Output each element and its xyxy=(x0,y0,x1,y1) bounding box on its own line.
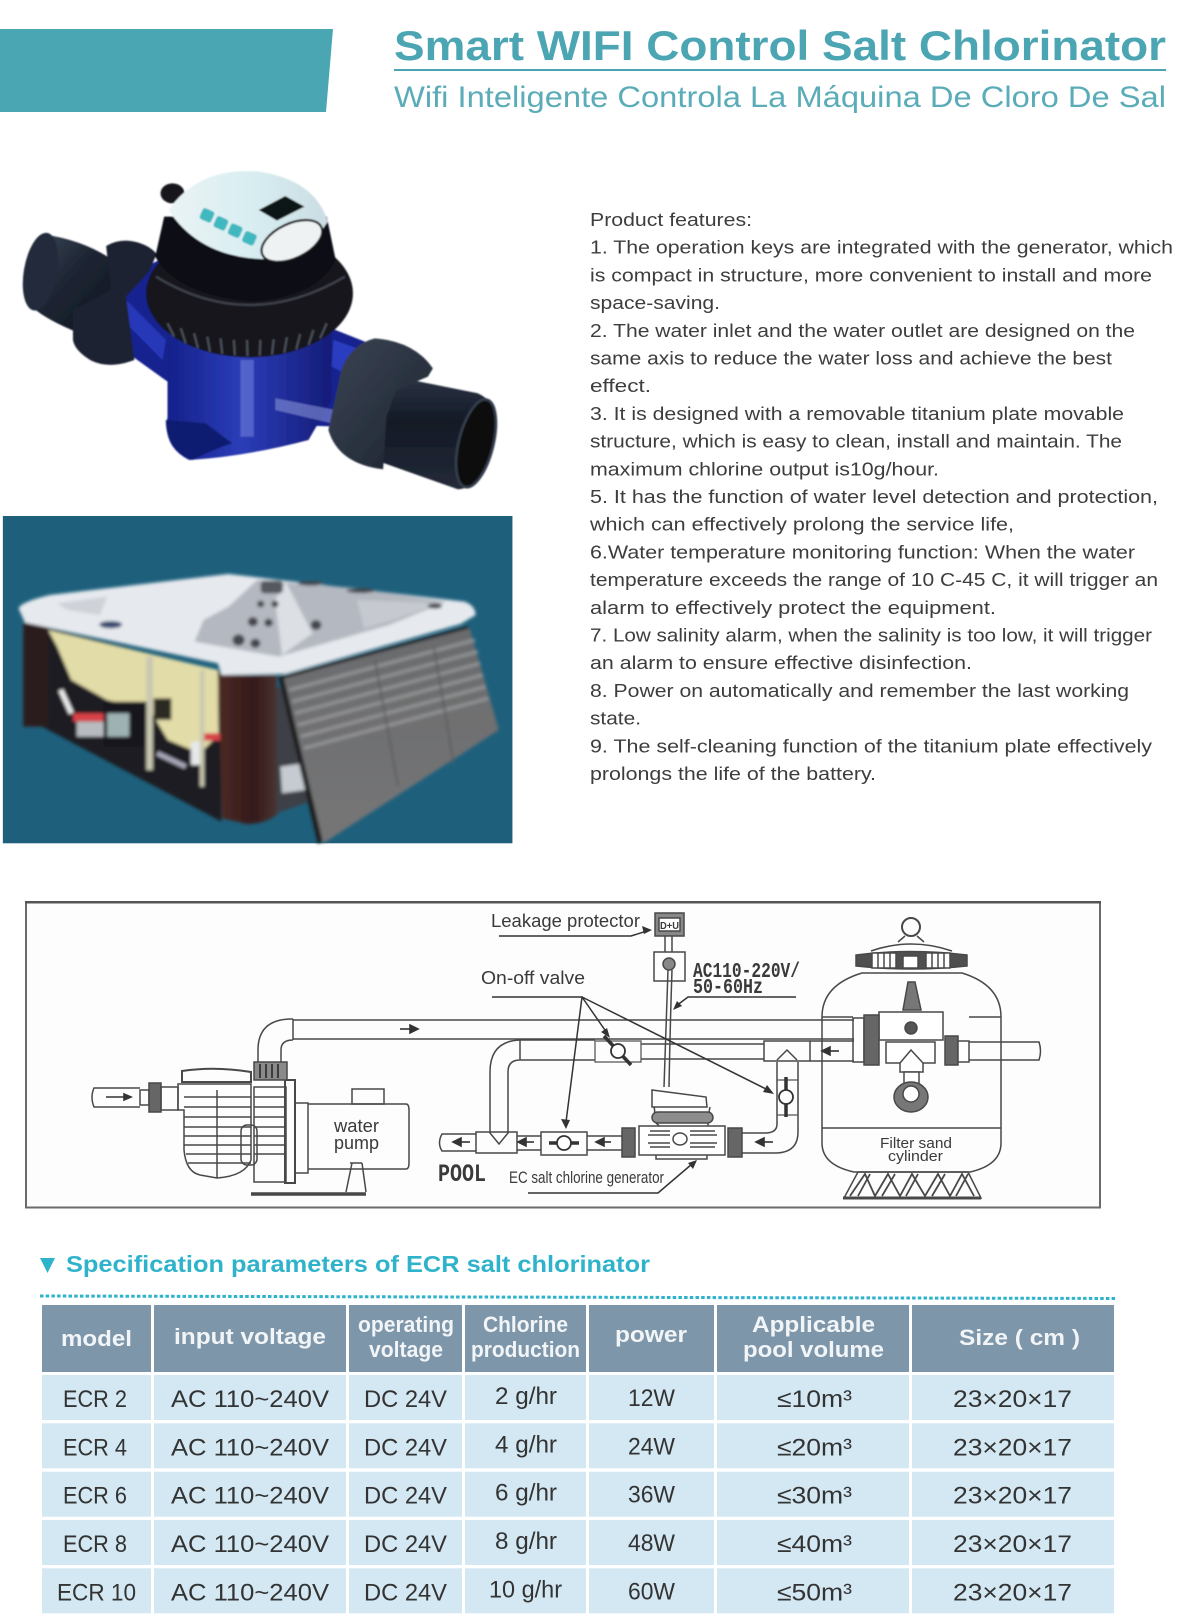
row ECR 6 xyxy=(42,1472,1114,1517)
product features text: effect. xyxy=(590,376,651,396)
row ECR 6: ≤30m³ xyxy=(777,1483,852,1510)
row ECR 8: ECR 8 xyxy=(63,1531,127,1558)
diagram labels: pump xyxy=(334,1133,379,1153)
spa photo xyxy=(3,516,512,844)
diagram labels: AC110-220V/ xyxy=(693,961,800,984)
product features text: 5. It has the function of water level detection and protection, xyxy=(590,487,1158,507)
header banner block xyxy=(0,29,333,112)
tub rim xyxy=(19,574,476,675)
row ECR 2: AC 110~240V xyxy=(171,1386,329,1413)
row ECR 2: 2 g/hr xyxy=(495,1383,557,1410)
row ECR 8: 48W xyxy=(628,1530,675,1557)
product photo: salt chlorinator xyxy=(17,171,504,491)
product features text: 3. It is designed with a removable titanium plate movable xyxy=(590,404,1124,424)
oval logo xyxy=(255,211,329,271)
row ECR 4: 4 g/hr xyxy=(495,1431,557,1458)
row ECR 8 xyxy=(42,1520,1114,1565)
table header row: production xyxy=(471,1337,580,1362)
blue body xyxy=(113,260,381,460)
row ECR 6: 36W xyxy=(628,1482,675,1509)
grip ridges xyxy=(168,323,327,356)
diagram labels: cylinder xyxy=(888,1148,943,1165)
product features text: same axis to reduce the water loss and achieve the best xyxy=(590,348,1112,368)
right union nut xyxy=(328,338,433,469)
product features text: 8. Power on automatically and remember the last working xyxy=(590,681,1129,701)
product features text: structure, which is easy to clean, install and maintain. The xyxy=(590,432,1122,452)
product features text: temperature exceeds the range of 10 C-45 C, it will trigger an xyxy=(590,570,1158,590)
specification table xyxy=(42,1305,1114,1613)
row ECR 8: 23×20×17 xyxy=(953,1531,1072,1558)
row ECR 8: ≤40m³ xyxy=(777,1531,852,1558)
table header row xyxy=(42,1305,1114,1372)
row ECR 4: 23×20×17 xyxy=(953,1434,1072,1461)
product features text: maximum chlorine output is10g/hour. xyxy=(590,459,939,479)
salt chlorine generator drawing xyxy=(622,1090,742,1159)
row ECR 8: AC 110~240V xyxy=(171,1531,329,1558)
table header row: operating xyxy=(358,1312,454,1337)
control face xyxy=(169,171,328,259)
display xyxy=(259,196,305,221)
diagram labels: Filter sand xyxy=(880,1135,952,1152)
row ECR 4: ECR 4 xyxy=(63,1434,127,1461)
table header row: Size ( cm ) xyxy=(959,1325,1080,1350)
diagram labels: Leakage protector xyxy=(491,911,640,931)
diagram labels: POOL xyxy=(438,1160,486,1189)
open side panel xyxy=(23,622,221,822)
upper cap xyxy=(155,217,336,302)
specification heading: Specification parameters of ECR salt chlorinator xyxy=(66,1251,650,1277)
table header row: voltage xyxy=(369,1337,443,1362)
row ECR 6: 23×20×17 xyxy=(953,1483,1072,1510)
row ECR 2: ≤10m³ xyxy=(777,1386,852,1413)
row ECR 10: 10 g/hr xyxy=(489,1576,562,1603)
inline valves xyxy=(549,1036,798,1150)
row ECR 10: AC 110~240V xyxy=(171,1579,329,1606)
left pipe xyxy=(17,230,119,333)
table header row: pool volume xyxy=(743,1337,884,1362)
row ECR 6: 6 g/hr xyxy=(495,1480,557,1507)
product features text: prolongs the life of the battery. xyxy=(590,764,876,784)
row ECR 2 xyxy=(42,1375,1114,1420)
product features text: 2. The water inlet and the water outlet are designed on the xyxy=(590,321,1135,341)
lower opening xyxy=(277,687,314,813)
diagram labels: 50-60Hz xyxy=(693,977,763,1000)
row ECR 2: ECR 2 xyxy=(63,1386,127,1413)
product features text: space-saving. xyxy=(590,293,720,313)
row ECR 10: 23×20×17 xyxy=(953,1579,1072,1606)
product features text: an alarm to ensure effective disinfection. xyxy=(590,653,972,673)
diagram labels xyxy=(333,911,952,1189)
insulating cover xyxy=(279,626,499,844)
diagram labels: On-off valve xyxy=(481,968,585,988)
callout arrows xyxy=(492,930,796,1193)
table header row: input voltage xyxy=(174,1324,326,1349)
callout arrowheads xyxy=(561,926,774,1169)
row ECR 4: 24W xyxy=(628,1433,675,1460)
right pipe xyxy=(375,377,497,489)
diagram labels: D+U xyxy=(660,921,679,932)
subtitle: Wifi Inteligente Controla La Máquina De Cloro De Sal xyxy=(394,81,1166,114)
title: Smart WIFI Control Salt Chlorinator xyxy=(394,22,1166,69)
diagram labels: EC salt chlorine generator xyxy=(509,1168,664,1187)
cream insulation xyxy=(48,630,219,753)
row ECR 10: ECR 10 xyxy=(57,1579,136,1606)
filter sand cylinder drawing xyxy=(822,918,1001,1198)
dotted divider xyxy=(40,1296,1117,1298)
row ECR 2: DC 24V xyxy=(364,1386,447,1413)
row ECR 4: ≤20m³ xyxy=(777,1434,852,1461)
left union nut xyxy=(73,241,157,365)
product features text: 1. The operation keys are integrated with the generator, which xyxy=(590,238,1173,258)
row ECR 6: AC 110~240V xyxy=(171,1483,329,1510)
row ECR 4 xyxy=(42,1423,1114,1468)
product features text: state. xyxy=(590,709,641,729)
row ECR 2: 23×20×17 xyxy=(953,1386,1072,1413)
product features text: 7. Low salinity alarm, when the salinity is too low, it will trigger xyxy=(590,626,1152,646)
product features text: 6.Water temperature monitoring function: When the water xyxy=(590,542,1135,562)
row ECR 6: ECR 6 xyxy=(63,1483,127,1510)
diagram labels: water xyxy=(333,1116,379,1136)
row ECR 10 xyxy=(42,1568,1114,1613)
right pipe mouth xyxy=(448,395,504,491)
table header row: Applicable xyxy=(752,1312,875,1337)
row ECR 8: 8 g/hr xyxy=(495,1528,557,1555)
table header row: power xyxy=(615,1322,687,1347)
electrical boxes xyxy=(654,913,685,1087)
row ECR 2: 12W xyxy=(628,1385,675,1412)
installation diagram xyxy=(25,901,1101,1208)
product features text: is compact in structure, more convenient to install and more xyxy=(590,265,1152,285)
row ECR 6: DC 24V xyxy=(364,1483,447,1510)
table header row: Chlorine xyxy=(483,1312,568,1337)
row ECR 4: AC 110~240V xyxy=(171,1434,329,1461)
row ECR 10: ≤50m³ xyxy=(777,1579,852,1606)
keys xyxy=(199,207,258,246)
jets xyxy=(99,581,442,648)
table header row: model xyxy=(61,1326,132,1351)
water pump drawing xyxy=(92,1019,409,1194)
row ECR 4: DC 24V xyxy=(364,1434,447,1461)
row ECR 10: DC 24V xyxy=(364,1579,447,1606)
tub basin xyxy=(195,580,446,657)
cap tab xyxy=(161,183,184,203)
main pipes xyxy=(293,1020,1040,1155)
product features text: 9. The self-cleaning function of the titanium plate effectively xyxy=(590,736,1152,756)
row ECR 10: 60W xyxy=(628,1578,675,1605)
title underline xyxy=(394,69,1166,71)
product features text: Product features: xyxy=(590,210,752,230)
lower cap ring xyxy=(146,229,353,357)
product features text xyxy=(589,210,1173,784)
row ECR 8: DC 24V xyxy=(364,1531,447,1558)
flow arrows xyxy=(106,1025,839,1146)
product features text: which can effectively prolong the service life, xyxy=(589,515,1014,535)
control box xyxy=(104,702,148,747)
corner post xyxy=(219,675,277,824)
product features text: alarm to effectively protect the equipment. xyxy=(590,598,996,618)
